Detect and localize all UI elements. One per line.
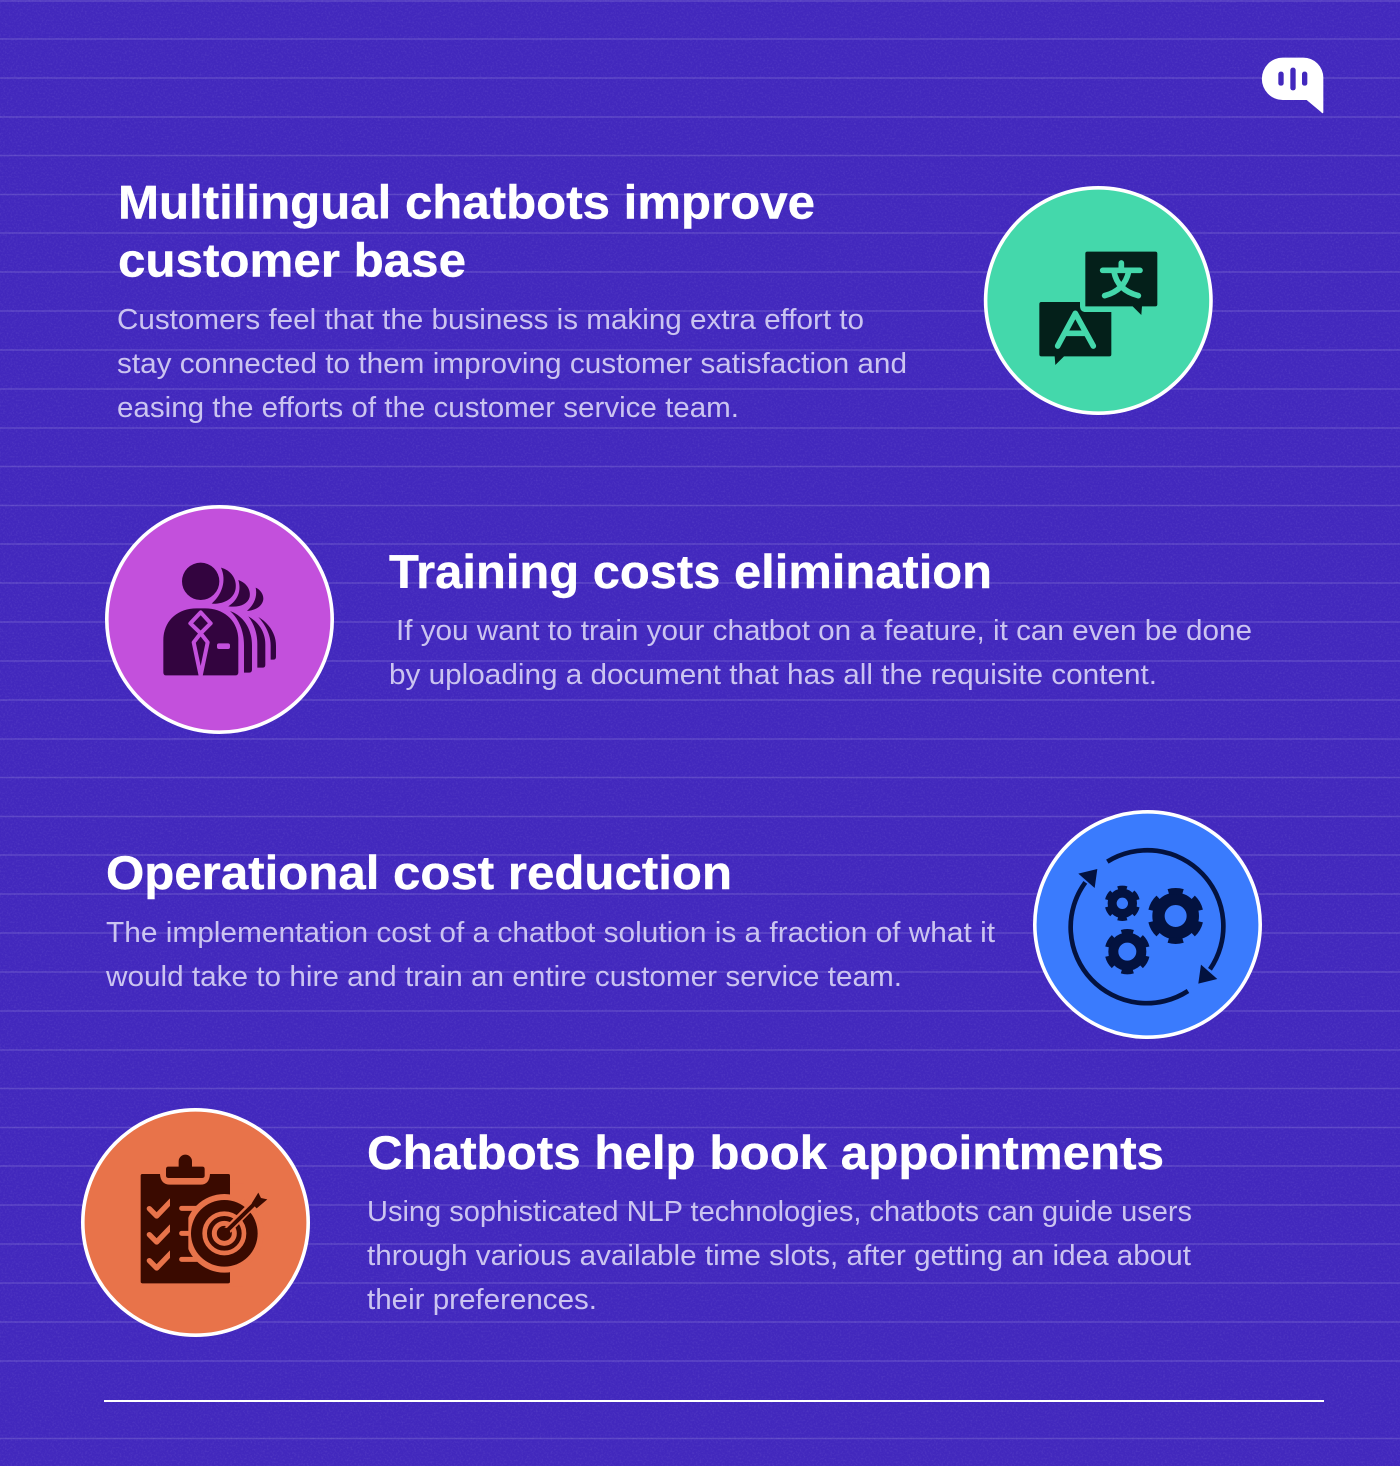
heading: chatbots help book appointments: Chatbots help book appointments	[367, 1127, 1164, 1180]
text block: appointments description	[367, 1196, 1192, 1316]
text block: multilingual description	[117, 304, 907, 424]
heading: multilingual chatbots	[118, 176, 815, 288]
text block: training description	[389, 615, 1252, 691]
panel: training costs	[107, 507, 1252, 732]
text block: training description: by uploading a document that has all the requisite content.	[389, 659, 1157, 691]
text block: multilingual description: easing the efforts of the customer service team.	[117, 392, 739, 424]
text block: operational description	[105, 917, 995, 993]
text block: multilingual description: Customers feel that the business is making extra effort to	[117, 304, 864, 336]
text block: training description: If you want to train your chatbot on a feature, it can even be done	[396, 615, 1252, 647]
text block: operational description: would take to hire and train an entire customer service team.	[105, 961, 902, 993]
panel: operational cost	[105, 812, 1260, 1037]
panel: book appointments	[83, 1110, 1192, 1335]
icon: clipboard with target	[83, 1110, 308, 1335]
icon: chat logo	[1262, 58, 1323, 113]
heading: multilingual chatbots: customer base	[118, 234, 466, 288]
heading: operational cost reduction: Operational cost reduction	[106, 847, 732, 900]
icon: gears with cycle arrows	[1035, 812, 1260, 1037]
text block: appointments description: their preferences.	[367, 1284, 597, 1316]
heading: multilingual chatbots: Multilingual chatbots improve	[118, 176, 815, 230]
text block: operational description: The implementation cost of a chatbot solution is a fraction of what it	[106, 917, 995, 949]
footer divider line	[104, 1400, 1324, 1402]
text block: appointments description: Using sophisticated NLP technologies, chatbots can guide users	[367, 1196, 1192, 1228]
heading: training costs elimination: Training costs elimination	[389, 546, 992, 599]
panel: multilingual chatbots	[117, 176, 1211, 424]
icon: translation speech bubbles	[986, 188, 1211, 413]
icon: team of people in suits	[107, 507, 332, 732]
text block: appointments description: through various available time slots, after getting an idea about	[367, 1240, 1191, 1272]
text block: multilingual description: stay connected to them improving customer satisfaction and	[117, 348, 907, 380]
